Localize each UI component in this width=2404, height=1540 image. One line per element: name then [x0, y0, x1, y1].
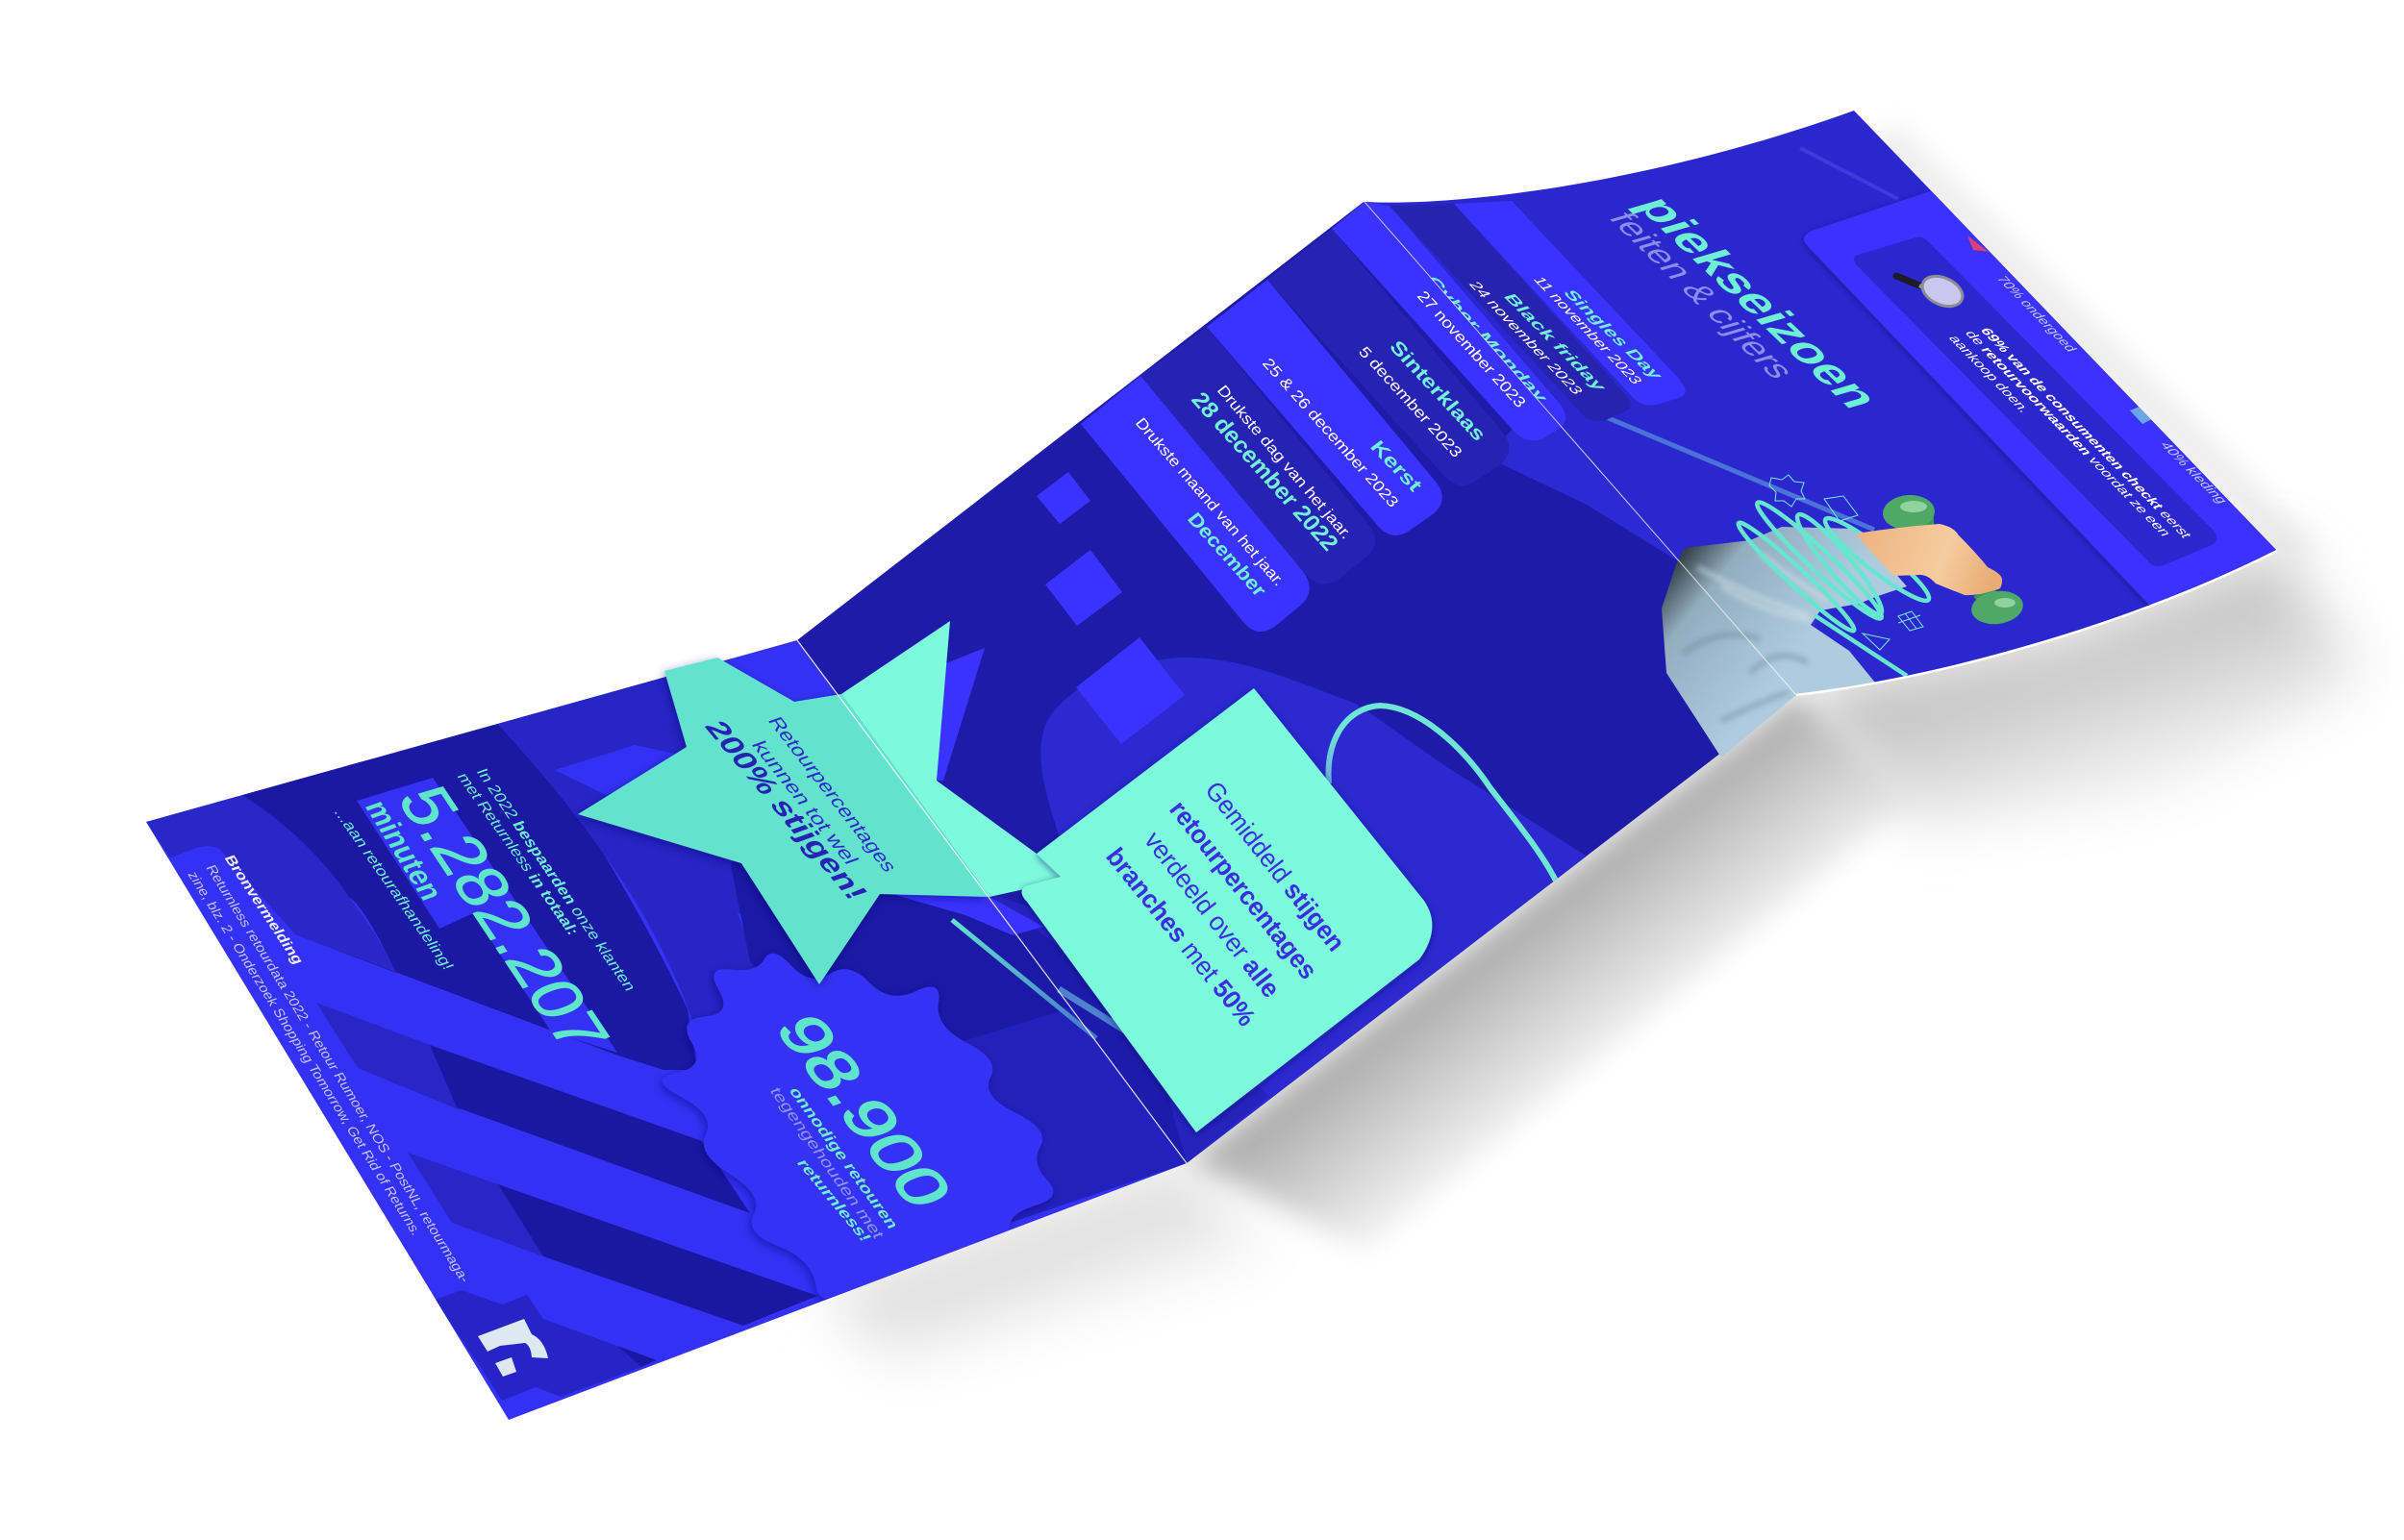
tab: drukste dag: Drukste dag van het jaar.	[1214, 383, 1355, 542]
icon: dumbbell bottom	[1969, 587, 2025, 628]
tab: sinterklaas: 5 december 2023	[1355, 344, 1465, 460]
teal loop line	[1329, 706, 1558, 884]
icon: magnifying glass	[1892, 273, 1964, 308]
tab: kerst	[1207, 280, 1442, 535]
arm photo with dumbbell	[1662, 493, 2025, 758]
stat: 98.900: onnodige retouren	[785, 1086, 901, 1230]
info text: de retourvoorwaarden voordat ze een	[1962, 329, 2175, 537]
date tabs	[1081, 201, 1685, 632]
cut-off stats	[1967, 236, 2232, 505]
panel: middle fold	[797, 202, 1827, 1182]
icon: gift	[1898, 611, 1923, 631]
icon: christmas tree	[1863, 633, 1890, 650]
page shadow	[827, 125, 2366, 1365]
note callout	[1021, 688, 1432, 1132]
cut-off stats: 40% kleding	[2157, 440, 2232, 505]
star callout: 200% stijgen!	[697, 717, 874, 904]
info text: 69% van de consumenten checkt eerst	[1977, 326, 2195, 539]
tab: december: December	[1183, 509, 1270, 601]
tab: kerst: 25 & 26 december 2023	[1259, 356, 1401, 510]
star callout: kunnen tot wel	[746, 738, 863, 867]
icon: dumbbell top	[1882, 493, 1936, 533]
faint diagonal line	[1800, 148, 1898, 199]
icon: returnless logo	[478, 1319, 548, 1377]
left panel text block: savings: 5.282.207	[383, 778, 625, 1060]
background arc	[1501, 427, 1796, 697]
crescent behind star	[882, 891, 1043, 935]
note callout: verdeeld over alle	[1139, 826, 1286, 1003]
tab: singles day: Singles Day	[1559, 288, 1667, 381]
tab: cyber monday: Cyber Monday	[1421, 275, 1553, 404]
tab: cyber monday	[1332, 202, 1565, 440]
fold lines	[797, 202, 2277, 1163]
sleeve folds	[1697, 553, 1827, 620]
stat: 98.900: returnless!	[792, 1158, 874, 1243]
stat: 98.900: 98.900	[762, 1007, 968, 1215]
stat: 98.900: tegengehouden met	[765, 1086, 888, 1241]
panel: right fold	[1365, 111, 2308, 695]
star callout: Retourpercentages	[763, 714, 901, 875]
source credits: Bronvermelding	[220, 854, 307, 966]
info text: aankoop doen.	[1945, 334, 2034, 414]
tab: sinterklaas: Sinterklaas	[1385, 337, 1490, 445]
background shapes left panel	[146, 668, 1187, 1401]
left panel text block: savings: minuten	[358, 796, 450, 905]
teal line under star	[952, 920, 1125, 1038]
cut-off stats: 70% ondergoed	[1993, 274, 2081, 353]
tab: drukste dag: 28 december 2022	[1186, 387, 1343, 556]
source credits: zine, blz. 2 - Onderzoek Shopping Tomorrow, Get Rid of Returns.	[185, 870, 425, 1237]
note callout: branches met 50%	[1100, 842, 1262, 1031]
tab: black friday: Black friday	[1499, 292, 1612, 393]
sleeve	[1662, 527, 1907, 758]
tab: drukste dag	[1140, 327, 1375, 584]
tab: black friday	[1390, 204, 1631, 421]
blue diagonal line	[1604, 416, 1874, 530]
tab: december: Drukste maand van het jaar.	[1132, 415, 1288, 589]
note callout: Gemiddeld stijgen	[1199, 776, 1351, 956]
inner info card	[1854, 237, 2217, 566]
bright card background	[1804, 190, 2308, 606]
title: piekseizoen	[1625, 191, 1892, 413]
left panel text block: savings: ...aan retourafhandeling!	[330, 807, 457, 972]
spiral lines	[1733, 495, 1936, 676]
icon: black friday badge	[1769, 475, 1805, 507]
hand	[1856, 524, 2002, 595]
tab: sinterklaas	[1267, 229, 1509, 485]
tab: singles day: 11 november 2023	[1529, 275, 1645, 385]
squares	[937, 472, 1185, 781]
tab: december	[1081, 376, 1310, 632]
tab: kerst: Kerst	[1365, 437, 1426, 496]
left panel text block: savings: met Returnless in totaal:	[453, 772, 582, 937]
title: feiten & cijfers	[1600, 209, 1804, 382]
source credits: Returnless retourdata 2022 - Retour Rumoer, NOS - PostNL, retourmaga-	[203, 863, 474, 1284]
note callout: retourpercentages	[1164, 795, 1323, 984]
icon: cyber monday card	[1824, 496, 1858, 521]
tab: singles day	[1454, 201, 1685, 406]
panel: left fold	[146, 640, 1187, 1420]
highlight behind big number	[357, 778, 617, 1053]
tab: black friday: 24 november 2023	[1465, 280, 1587, 396]
stat: 98.900	[762, 1007, 968, 1243]
small season icons	[1769, 475, 1923, 650]
left panel text block: savings: In 2022 bespaarden onze klanten	[472, 767, 639, 993]
tab: cyber monday: 27 november 2023	[1414, 288, 1529, 411]
icon: wavy badge	[663, 954, 1053, 1301]
star callout	[578, 621, 1067, 984]
background blob	[1039, 658, 1615, 1182]
